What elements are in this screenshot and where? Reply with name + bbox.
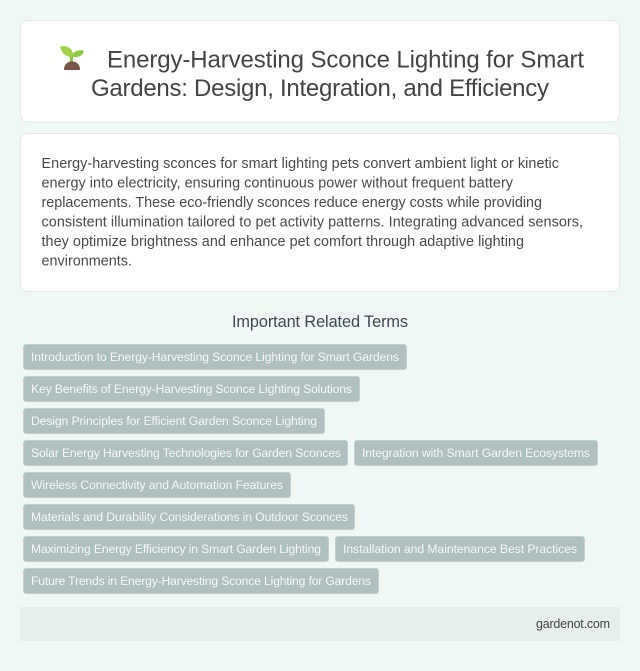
chip: solar technologies: Solar Energy Harvesting Technologies for Garden Sconces bbox=[31, 446, 341, 460]
chip: materials and durability: Materials and Durability Considerations in Outdoor Sconces bbox=[31, 510, 348, 524]
chip: materials and durability bbox=[24, 504, 354, 530]
text block: description: consistent illumination tailored to pet activity patterns. Integrating advanced sensors, bbox=[42, 214, 583, 230]
title: Gardens: Design, Integration, and Efficiency bbox=[91, 75, 549, 102]
chip: key benefits: Key Benefits of Energy-Harvesting Sconce Lighting Solutions bbox=[31, 382, 352, 396]
chip: introduction bbox=[24, 344, 406, 370]
text block: description: Energy-harvesting sconces for smart lighting pets convert ambient light or kinetic bbox=[42, 156, 559, 172]
panel: term chips bbox=[24, 344, 598, 594]
text block: description: replacements. These eco-friendly sconces reduce energy costs while providing bbox=[42, 195, 542, 211]
chip: energy efficiency: Maximizing Energy Efficiency in Smart Garden Lighting bbox=[31, 542, 321, 556]
chip: energy efficiency bbox=[24, 536, 328, 562]
panel: title card bbox=[20, 20, 620, 122]
panel: description bbox=[20, 134, 620, 292]
text block: description bbox=[42, 156, 583, 270]
chip: introduction: Introduction to Energy-Harvesting Sconce Lighting for Smart Gardens bbox=[31, 350, 399, 364]
chip: wireless connectivity: Wireless Connectivity and Automation Features bbox=[31, 478, 283, 492]
chip: future trends bbox=[24, 568, 378, 594]
title bbox=[91, 46, 584, 102]
icon: seedling bbox=[60, 46, 84, 70]
text block: description: they optimize brightness and enhance pet comfort through adaptive lighting bbox=[42, 234, 524, 250]
chip: ecosystem integration: Integration with Smart Garden Ecosystems bbox=[362, 446, 590, 460]
chip: installation and maintenance bbox=[336, 536, 584, 562]
footer bbox=[20, 607, 620, 641]
chip: wireless connectivity bbox=[24, 472, 290, 498]
chip: design principles bbox=[24, 408, 324, 434]
chip: key benefits bbox=[24, 376, 360, 402]
chip: future trends: Future Trends in Energy-Harvesting Sconce Lighting for Gardens bbox=[31, 574, 371, 588]
title: Energy-Harvesting Sconce Lighting for Smart bbox=[107, 46, 584, 74]
chip: installation and maintenance: Installation and Maintenance Best Practices bbox=[343, 542, 577, 556]
chip: design principles: Design Principles for Efficient Garden Sconce Lighting bbox=[31, 414, 317, 428]
footer: gardenot.com bbox=[536, 617, 610, 631]
text block: description: energy into electricity, ensuring continuous power without frequent battery bbox=[42, 176, 514, 192]
heading: related terms: Important Related Terms bbox=[232, 313, 408, 331]
chip: ecosystem integration bbox=[354, 440, 598, 466]
text block: description: environments. bbox=[42, 254, 132, 270]
chip: solar technologies bbox=[24, 440, 348, 466]
